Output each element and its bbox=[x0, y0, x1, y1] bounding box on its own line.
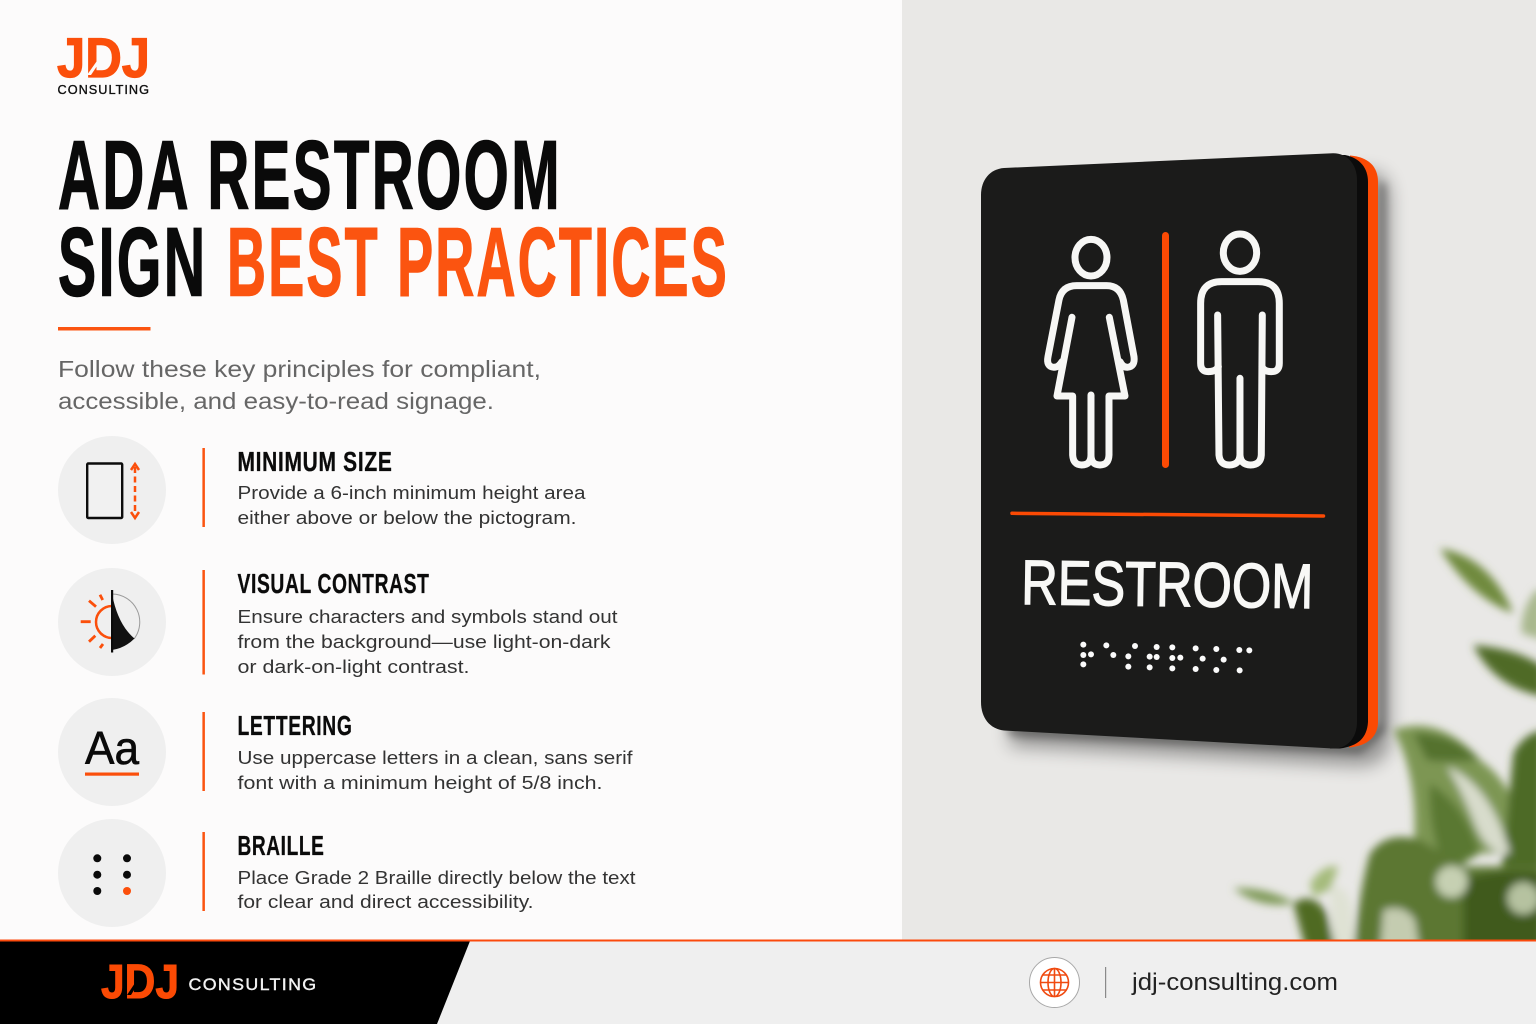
subtitle bbox=[58, 356, 541, 414]
item text: Provide a 6-inch minimum height area bbox=[238, 482, 586, 503]
icon: globe bbox=[1030, 958, 1080, 1008]
sign black edge bbox=[1330, 155, 1368, 748]
item text: MINIMUM SIZE bbox=[238, 446, 392, 477]
title bbox=[58, 120, 729, 316]
title: SIGN bbox=[58, 208, 208, 316]
title: BEST PRACTICES bbox=[227, 208, 729, 316]
item text: font with a minimum height of 5/8 inch. bbox=[238, 772, 602, 793]
item text: Place Grade 2 Braille directly below the text bbox=[238, 867, 636, 888]
pictogram: woman bbox=[1048, 239, 1134, 465]
icon: lettering bbox=[58, 698, 166, 806]
pictogram: man bbox=[1201, 234, 1279, 465]
logo mark: JDJ bbox=[57, 26, 150, 89]
subtitle: Follow these key principles for compliant, bbox=[58, 356, 541, 382]
footer separator bbox=[1105, 967, 1106, 998]
footer background bbox=[0, 941, 1536, 1024]
icon: minimum size bbox=[58, 436, 166, 544]
item text bbox=[238, 830, 636, 912]
item divider bbox=[202, 570, 205, 674]
item text: VISUAL CONTRAST bbox=[238, 568, 430, 599]
footer bbox=[0, 940, 1536, 1024]
item text: for clear and direct accessibility. bbox=[238, 891, 534, 912]
braille dots bbox=[1080, 642, 1252, 673]
item text: or dark-on-light contrast. bbox=[238, 656, 470, 677]
item text: Use uppercase letters in a clean, sans serif bbox=[238, 747, 633, 768]
footer accent line bbox=[0, 940, 1536, 942]
item text bbox=[238, 710, 633, 793]
sign orange edge bbox=[1349, 156, 1378, 748]
icon: lettering: Aa bbox=[85, 722, 139, 774]
footer black band bbox=[0, 941, 470, 1024]
sign centre divider bbox=[1162, 232, 1169, 468]
item text: BRAILLE bbox=[238, 830, 324, 861]
logo wordmark: CONSULTING bbox=[58, 83, 150, 97]
title accent rule bbox=[58, 327, 150, 330]
panel: wall photo with sign bbox=[902, 0, 1536, 953]
title: ADA RESTROOM bbox=[58, 120, 562, 230]
item divider bbox=[202, 712, 205, 791]
sign horizontal rule bbox=[1012, 513, 1324, 516]
panel: braille bbox=[58, 819, 636, 927]
panel: minimum size bbox=[58, 436, 586, 544]
item text bbox=[238, 446, 586, 528]
sign label: RESTROOM bbox=[1021, 548, 1314, 622]
blurred plant bbox=[1233, 548, 1536, 953]
footer wordmark: CONSULTING bbox=[188, 975, 318, 994]
icon: contrast sun bbox=[58, 568, 166, 676]
item text: Ensure characters and symbols stand out bbox=[238, 606, 618, 627]
item divider bbox=[202, 832, 205, 911]
sign shadow bbox=[1005, 172, 1390, 766]
item text: LETTERING bbox=[238, 710, 352, 741]
panel: lettering bbox=[58, 698, 633, 806]
website url: jdj-consulting.com bbox=[1131, 969, 1338, 996]
subtitle: accessible, and easy-to-read signage. bbox=[58, 388, 494, 414]
logo: JDJ Consulting bbox=[57, 26, 150, 97]
footer logo: JDJ bbox=[101, 956, 179, 1009]
item text bbox=[238, 568, 618, 677]
restroom sign bbox=[981, 153, 1378, 749]
item text: from the background—use light-on-dark bbox=[238, 631, 611, 652]
item text: either above or below the pictogram. bbox=[238, 507, 576, 528]
panel: left content background bbox=[0, 0, 902, 940]
icon: braille cell bbox=[58, 819, 166, 927]
item divider bbox=[202, 448, 205, 527]
panel: visual contrast bbox=[58, 568, 618, 677]
sign face bbox=[981, 153, 1357, 749]
